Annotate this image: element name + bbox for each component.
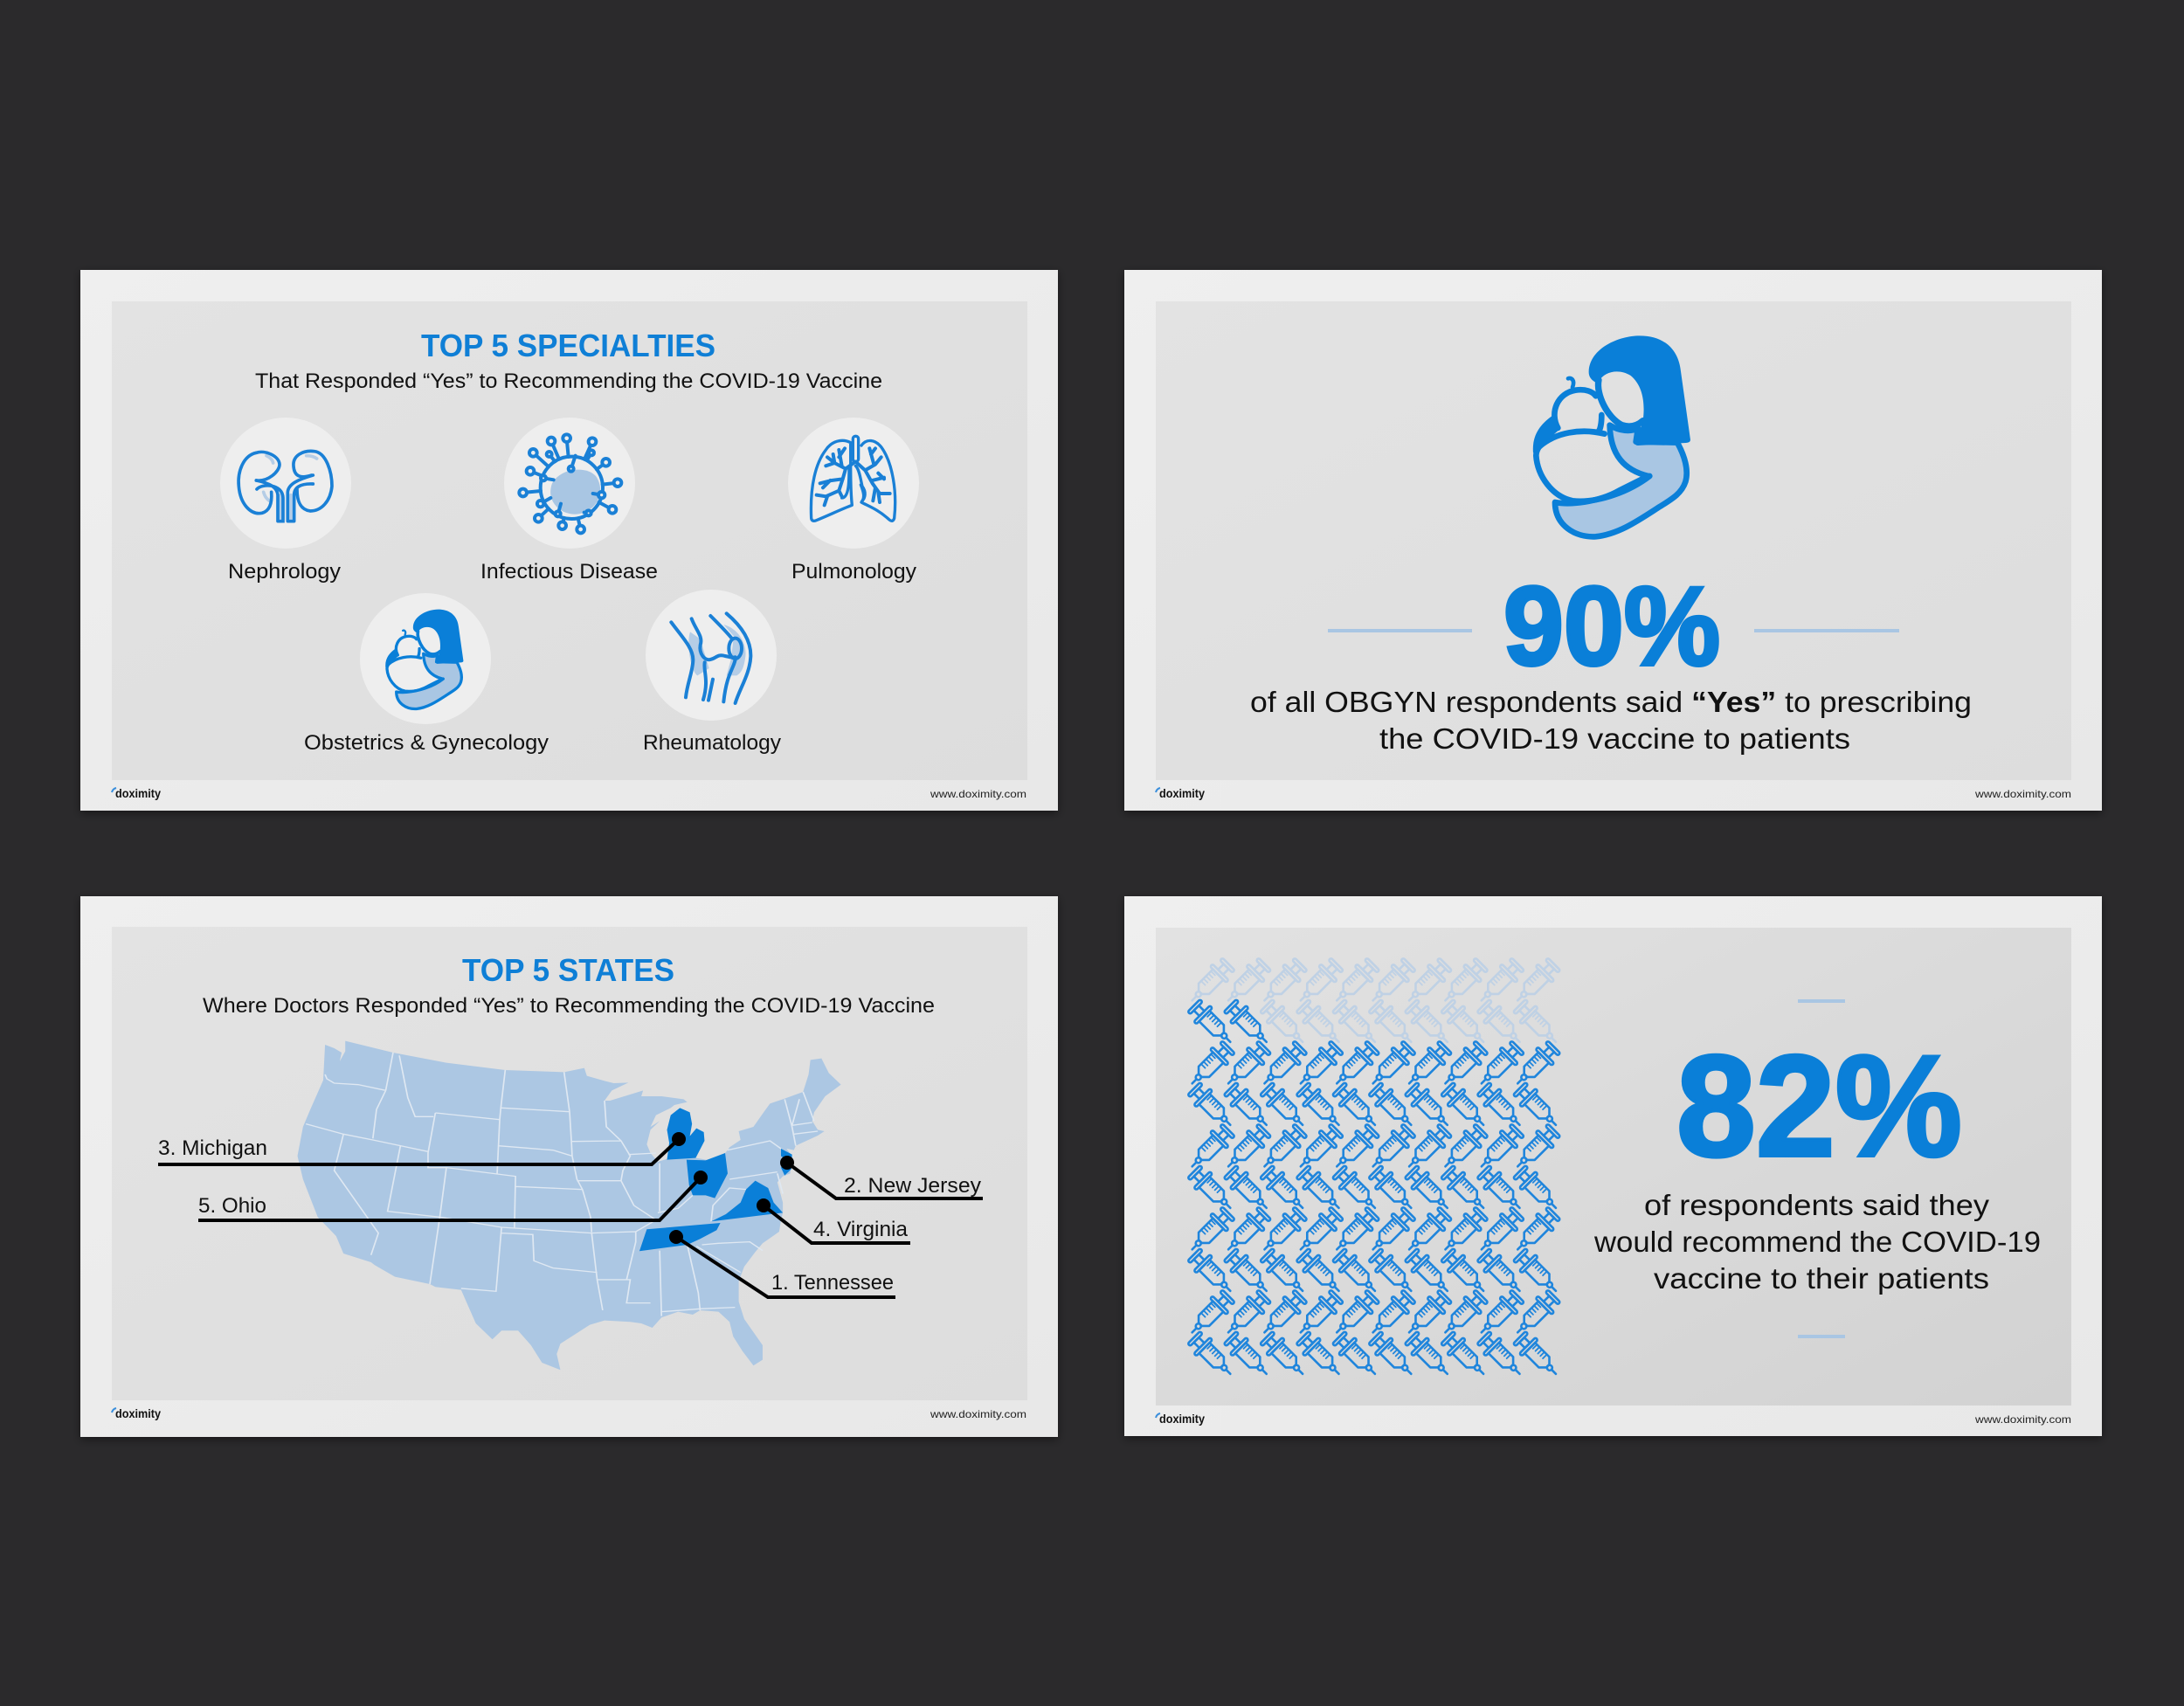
label: infectious disease: Infectious Disease bbox=[480, 560, 658, 584]
state: virginia bbox=[711, 1181, 783, 1221]
callout: ohio bbox=[198, 1171, 708, 1220]
callout: virginia bbox=[757, 1198, 910, 1243]
panel: 90 percent obgyn bbox=[1124, 270, 2102, 811]
big number 82 percent: 82% bbox=[1676, 1026, 1962, 1186]
subtitle: states: Where Doctors Responded “Yes” to Recommending the COVID-19 Vaccine bbox=[203, 994, 935, 1018]
logo: doximity: doximity bbox=[1159, 1412, 1205, 1426]
caption: recommend line 1: of respondents said they bbox=[1644, 1189, 1990, 1221]
url: www.doximity.com bbox=[930, 788, 1026, 800]
logo: doximity: doximity bbox=[1159, 786, 1205, 800]
big number 90 percent: 90% bbox=[1503, 564, 1720, 689]
divider left bbox=[1328, 629, 1472, 632]
callout: michigan bbox=[158, 1132, 686, 1164]
caption: obgyn line 1: of all OBGYN respondents said “Yes” to prescribing bbox=[1250, 686, 1972, 718]
state: michigan bbox=[667, 1108, 704, 1160]
icon: knee joint bbox=[646, 590, 777, 721]
callout: virginia: 4. Virginia bbox=[813, 1218, 909, 1241]
label: nephrology: Nephrology bbox=[228, 560, 341, 584]
map: united states bbox=[298, 1041, 841, 1370]
icon: virus bbox=[504, 418, 635, 549]
panel: top 5 specialties bbox=[80, 270, 1058, 811]
callout: tennessee bbox=[669, 1230, 895, 1297]
state: new jersey bbox=[781, 1149, 792, 1176]
callout: tennessee: 1. Tennessee bbox=[771, 1271, 894, 1295]
heading: top 5 states: TOP 5 STATES bbox=[462, 952, 674, 988]
panel: 82 percent recommend bbox=[1124, 896, 2102, 1436]
divider bottom bbox=[1798, 1335, 1845, 1338]
row 2 mixed bbox=[1185, 998, 1564, 1050]
heading: top 5 specialties: TOP 5 SPECIALTIES bbox=[421, 328, 715, 363]
caption: recommend line 3: vaccine to their patients bbox=[1654, 1262, 1989, 1295]
icon: mother and baby large bbox=[1533, 335, 1690, 536]
icon: mother and baby small bbox=[360, 593, 491, 724]
icon: lungs bbox=[788, 418, 919, 549]
state: ohio bbox=[687, 1153, 728, 1198]
divider right bbox=[1754, 629, 1899, 632]
url: www.doximity.com bbox=[930, 1408, 1026, 1420]
faded row 1 bbox=[1184, 956, 1562, 1009]
callout: new jersey: 2. New Jersey bbox=[844, 1174, 981, 1198]
callout: ohio: 5. Ohio bbox=[198, 1194, 266, 1218]
solid rows bbox=[1184, 1039, 1564, 1382]
logo: doximity: doximity bbox=[115, 786, 161, 800]
label: pulmonology: Pulmonology bbox=[791, 560, 916, 584]
url: www.doximity.com bbox=[1974, 1413, 2071, 1426]
logo: doximity: doximity bbox=[115, 1406, 161, 1420]
subtitle: specialties: That Responded “Yes” to Recommending the COVID-19 Vaccine bbox=[255, 370, 882, 393]
label: obstetrics and gynecology: Obstetrics & Gynecology bbox=[304, 731, 549, 755]
chart: syringe pictogram bbox=[1184, 956, 1564, 1382]
state: tennessee bbox=[639, 1223, 721, 1251]
divider top bbox=[1798, 999, 1845, 1003]
url: www.doximity.com bbox=[1974, 788, 2071, 800]
callout: michigan: 3. Michigan bbox=[158, 1136, 267, 1160]
icon: kidneys bbox=[220, 418, 351, 549]
label: rheumatology: Rheumatology bbox=[643, 731, 781, 755]
callout: new jersey bbox=[780, 1156, 983, 1198]
caption: obgyn line 2: the COVID-19 vaccine to patients bbox=[1379, 722, 1850, 755]
caption: recommend line 2: would recommend the COVID-19 bbox=[1593, 1226, 2041, 1258]
panel: top 5 states bbox=[80, 896, 1058, 1437]
